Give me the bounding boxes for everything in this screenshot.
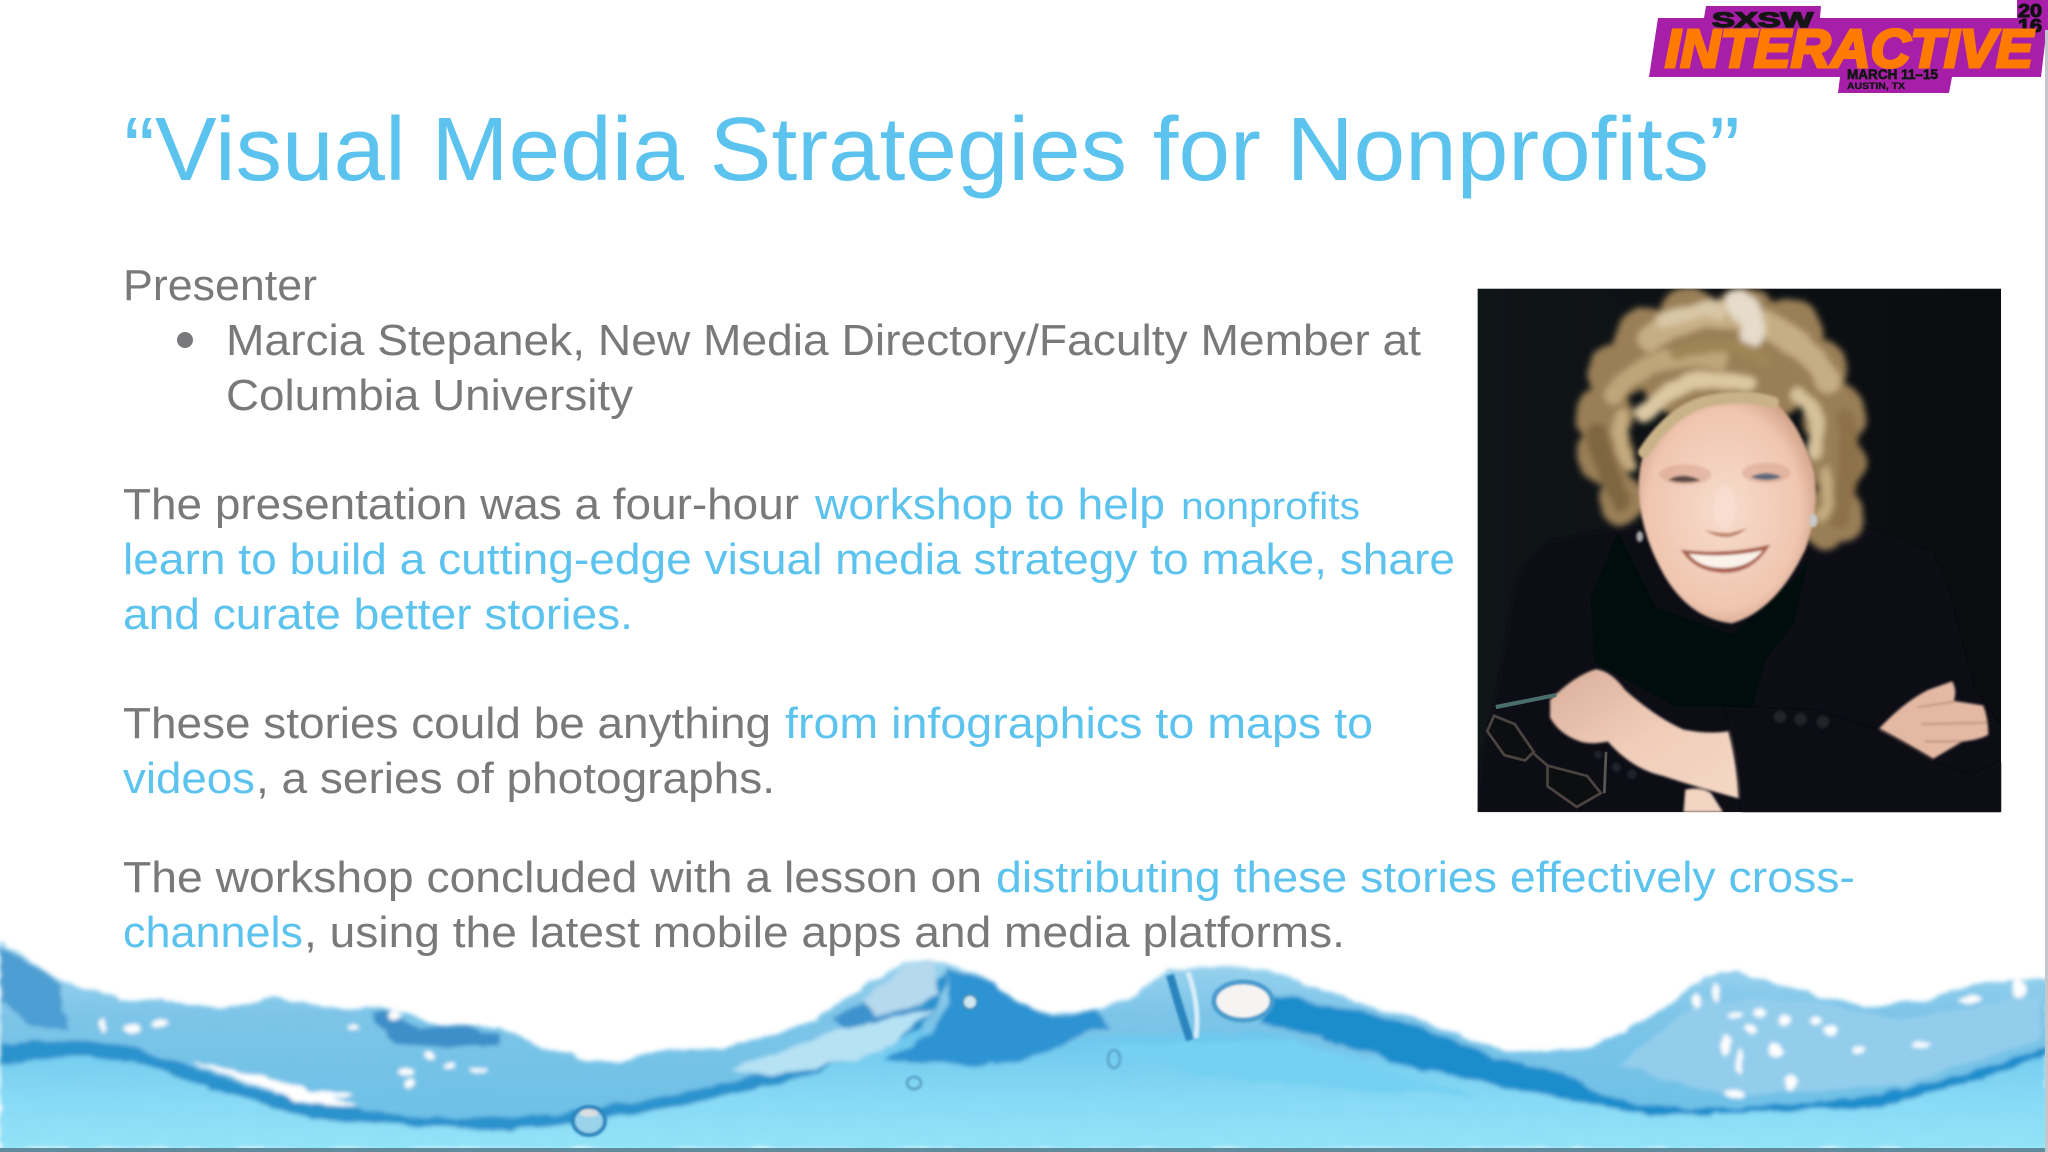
eye sockets <box>1659 464 1711 485</box>
text block: workshop conclusion: distributing these stories effectively cross- <box>996 853 1855 902</box>
left dark edge <box>0 945 68 1030</box>
INTERACTIVE wordmark: INTERACTIVE <box>1665 19 2035 79</box>
presenter name: Marcia Stepanek, New Media Directory/Faculty Member at <box>226 316 1421 365</box>
upper water body <box>0 940 2048 1130</box>
text block: story formats: from infographics to maps to <box>785 699 1373 748</box>
text block: workshop description: The presentation was a four-hour <box>123 480 799 529</box>
event dates: MARCH 11–15 <box>1847 66 1938 82</box>
text block: story formats <box>123 699 1373 803</box>
mouth <box>1681 544 1770 573</box>
text block: story formats: videos <box>123 754 255 803</box>
text block: workshop description: learn to build a cutting-edge visual media strategy to make, share <box>123 535 1455 584</box>
jacket <box>1478 528 2001 812</box>
presenter name <box>226 316 1421 420</box>
turtleneck <box>1591 531 1811 707</box>
text block: workshop description: workshop to help <box>814 480 1165 529</box>
presenter name: Columbia University <box>226 371 633 420</box>
text block: workshop description: nonprofits <box>1181 486 1360 528</box>
right edge line <box>2045 30 2048 1152</box>
text block: workshop description: and curate better stories. <box>123 590 633 639</box>
text block: workshop conclusion: channels <box>123 908 303 957</box>
bubble: large at crest <box>1170 972 1272 1040</box>
dark patch: crest right <box>882 970 1110 1065</box>
logo: SXSW Interactive 2016 <box>1649 0 2048 93</box>
photo: portrait of presenter <box>1478 289 2001 812</box>
event location: AUSTIN, TX <box>1847 81 1905 91</box>
text block: story formats: , a series of photographs. <box>256 754 775 803</box>
text block: story formats: These stories could be anything <box>123 699 771 748</box>
highlight ribbon <box>731 1007 934 1077</box>
water band: left trough <box>0 970 947 1130</box>
bottom edge line <box>0 1148 2048 1152</box>
right foam tint <box>1620 995 2040 1095</box>
bubble: small below surface <box>573 1107 605 1135</box>
SXSW wordmark: SXSW <box>1712 9 1813 32</box>
right sleeve <box>1725 707 2001 812</box>
text block: workshop description <box>123 480 1455 639</box>
title: “Visual Media Strategies for Nonprofits” <box>124 100 1740 200</box>
illustration: water wave <box>0 940 2048 1150</box>
year tile: 20 <box>2018 1 2042 21</box>
presenter heading: Presenter <box>123 261 317 310</box>
highlight patch: crest <box>862 962 938 1018</box>
bubble: crest droplet <box>963 995 977 1009</box>
logo banner <box>1649 6 2048 93</box>
bubble: tiny ring <box>907 1077 921 1089</box>
dark patch: left crest <box>372 1012 500 1047</box>
year tile: 16 <box>2018 16 2042 36</box>
glasses <box>1487 695 1606 807</box>
text block: presenter <box>123 261 1421 420</box>
text block: workshop conclusion: , using the latest mobile apps and media platforms. <box>304 908 1345 957</box>
left arm and hand <box>1550 669 1739 798</box>
shirt gap <box>1684 789 1723 812</box>
nose shadow <box>1704 528 1747 537</box>
hair fringe <box>1644 397 1773 452</box>
face <box>1639 395 1816 623</box>
hair <box>1575 289 1868 552</box>
bullet <box>177 332 193 348</box>
bubble: tiny ring right <box>1108 1050 1120 1068</box>
nose highlight <box>1714 485 1736 530</box>
lower water body <box>0 1030 2048 1150</box>
year tile <box>2017 0 2048 36</box>
white speckles <box>100 980 2026 1108</box>
water band: right slope <box>1262 995 2048 1115</box>
dark patch: central crest <box>830 995 927 1030</box>
light water under crest <box>1090 1040 1480 1095</box>
text block: workshop conclusion: The workshop concluded with a lesson on <box>123 853 982 902</box>
earrings <box>1809 514 1817 527</box>
finger lines <box>1918 702 1987 741</box>
text block: workshop conclusion <box>123 853 1855 957</box>
eyes <box>1668 476 1701 483</box>
right hand <box>1879 681 1988 759</box>
jacket buttons <box>1594 710 1829 779</box>
